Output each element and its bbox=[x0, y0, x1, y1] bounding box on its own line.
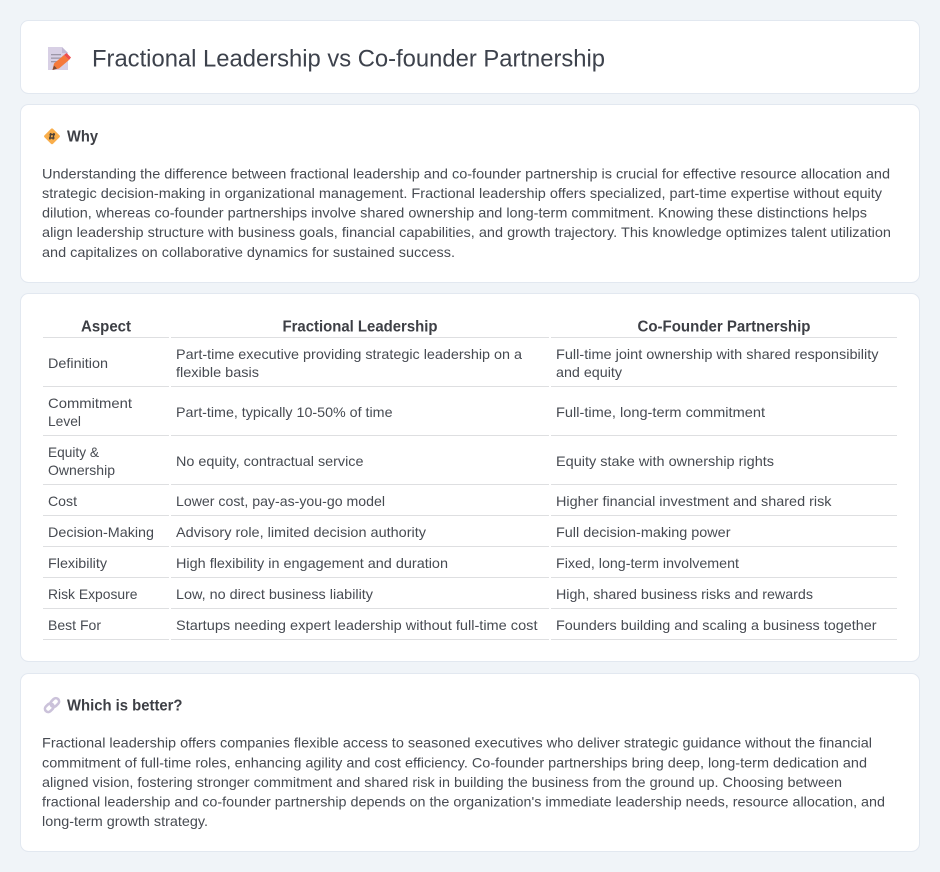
table row: best for: Startups needing expert leadership without full-time cost bbox=[176, 617, 538, 633]
table row: commitment level: Part-time, typically 10-50% of time bbox=[176, 404, 393, 420]
table row: commitment level: Commitment bbox=[48, 395, 132, 411]
icon: document with pencil bbox=[48, 47, 71, 70]
panel: why bbox=[20, 104, 920, 282]
table row: flexibility: High flexibility in engagement and duration bbox=[176, 555, 448, 571]
table row: decision-making bbox=[48, 524, 731, 540]
table row: decision-making: Advisory role, limited decision authority bbox=[176, 524, 426, 540]
text block: why paragraph: dilution, whereas co-founder partnerships involve shared ownership and long-term commitment. Knowing these distinctions helps bbox=[42, 205, 867, 221]
table row: definition: and equity bbox=[556, 364, 622, 380]
table row: best for: Founders building and scaling a business together bbox=[556, 617, 877, 633]
panel: comparison table bbox=[20, 294, 920, 662]
table row: definition: flexible basis bbox=[176, 364, 259, 380]
text block: why paragraph: align leadership structure with business goals, financial capabilities, and growth trajectory. This knowledge optimizes talent utilization bbox=[42, 224, 891, 240]
text block: why paragraph: strategic decision-making in organizational management. Fractional leadership offers specialized, part-time expertise without equity bbox=[42, 185, 882, 201]
table row: risk exposure: Low, no direct business liability bbox=[176, 586, 373, 602]
table row: cost: Higher financial investment and shared risk bbox=[556, 493, 833, 509]
table row: flexibility: Flexibility bbox=[48, 555, 107, 571]
table row: definition bbox=[48, 346, 878, 380]
icon: orange diamond bbox=[44, 128, 60, 145]
table row: decision-making: Full decision-making power bbox=[556, 524, 731, 540]
table row: definition: Part-time executive providing strategic leadership on a bbox=[176, 346, 522, 362]
table row: equity and ownership: Equity & bbox=[48, 444, 100, 460]
table row: cost bbox=[48, 493, 833, 509]
text block: which is better paragraph: long-term growth strategy. bbox=[42, 813, 208, 829]
table row: decision-making: Decision-Making bbox=[48, 524, 154, 540]
table row: flexibility bbox=[48, 555, 739, 571]
table row: commitment level: Full-time, long-term commitment bbox=[556, 404, 765, 420]
table row: cost: Lower cost, pay-as-you-go model bbox=[176, 493, 385, 509]
table row: definition: Definition bbox=[48, 355, 108, 371]
table row: equity and ownership: No equity, contractual service bbox=[176, 453, 364, 469]
heading: why: Why bbox=[67, 128, 98, 146]
text block: why paragraph: and capitalizes on collaborative dynamics for sustained success. bbox=[42, 244, 455, 260]
heading: which is better: Which is better? bbox=[67, 698, 182, 714]
text block: which is better paragraph bbox=[42, 735, 885, 829]
text block: which is better paragraph: Fractional leadership offers companies flexible access to seasoned executives who deliver strategic guidance without the financial bbox=[42, 735, 872, 751]
table row: flexibility: Fixed, long-term involvement bbox=[556, 555, 739, 571]
text block: why paragraph: Understanding the difference between fractional leadership and co-founder partnership is crucial for effective resource allocation and bbox=[42, 166, 890, 182]
panel: title header bbox=[20, 20, 920, 94]
panel: which is better bbox=[20, 674, 920, 852]
table row: risk exposure bbox=[48, 586, 813, 602]
title: Fractional Leadership vs Co-founder Partnership bbox=[92, 46, 605, 72]
text block: why paragraph bbox=[42, 166, 891, 260]
table row: commitment level bbox=[48, 395, 765, 429]
text block: which is better paragraph: fractional leadership and co-founder partnership depends on the organization's immediate leadership needs, resource allocation, and bbox=[42, 794, 885, 810]
table header row: Co-Founder Partnership bbox=[638, 318, 811, 336]
table row: equity and ownership: Ownership bbox=[48, 462, 115, 478]
icon: chain link bbox=[44, 697, 60, 713]
table header row: Aspect bbox=[81, 318, 132, 336]
table row: equity and ownership bbox=[48, 444, 774, 478]
table row: best for: Best For bbox=[48, 617, 101, 633]
text block: which is better paragraph: commitment of full-time roles, enhancing agility and cost efficiency. Co-founder partnerships bring deep, long-term dedication and bbox=[42, 754, 867, 770]
table header row: Fractional Leadership bbox=[282, 318, 438, 336]
table row: best for bbox=[48, 617, 877, 633]
table row: risk exposure: High, shared business risks and rewards bbox=[556, 586, 813, 602]
table row: risk exposure: Risk Exposure bbox=[48, 586, 138, 602]
table header row bbox=[81, 318, 811, 336]
table row: cost: Cost bbox=[48, 493, 77, 509]
table row: equity and ownership: Equity stake with ownership rights bbox=[556, 453, 774, 469]
table row: definition: Full-time joint ownership with shared responsibility bbox=[556, 346, 878, 362]
table row: commitment level: Level bbox=[48, 413, 81, 429]
text block: which is better paragraph: aligned vision, fostering stronger commitment and shared risk in building the business from the ground up. Choosing between bbox=[42, 774, 842, 790]
